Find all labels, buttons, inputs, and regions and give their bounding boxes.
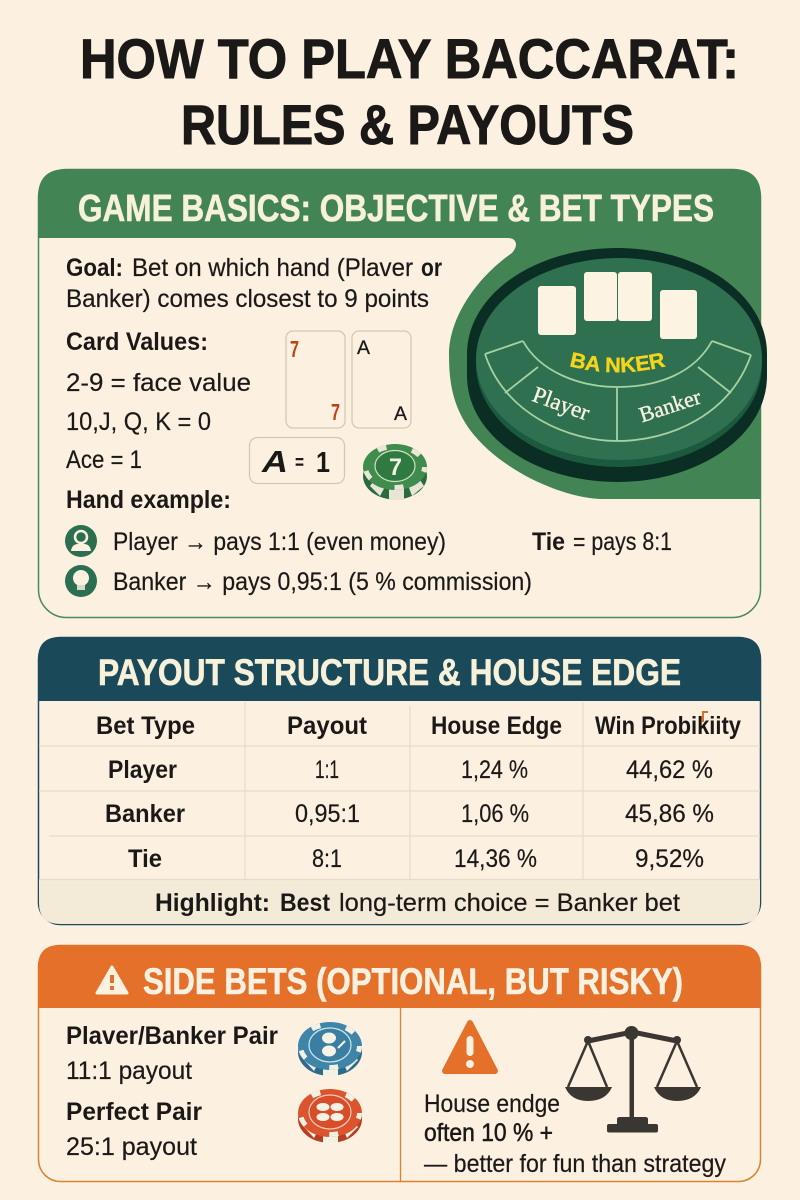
icon: card seven	[286, 331, 345, 428]
text block: goal	[66, 254, 442, 313]
table row: tie	[128, 845, 704, 873]
text: perfect pair: 25:1 payout	[66, 1133, 197, 1161]
title: RULES & PAYOUTS	[181, 93, 634, 156]
panel outline: game basics	[38, 170, 760, 618]
text: side bet warning: — better for fun than strategy	[424, 1150, 726, 1178]
table cards	[538, 272, 697, 339]
table row: player: 1:1	[315, 756, 339, 784]
icon: red chip	[298, 1089, 362, 1143]
divider	[400, 1008, 402, 1181]
text: pair bet	[66, 1022, 278, 1085]
text: banker payout: Banker → pays 0,95:1 (5 % commission)	[113, 568, 532, 596]
text: perfect pair	[66, 1098, 202, 1161]
highlight band	[39, 880, 760, 924]
heading: side bets: SIDE BETS (OPTIONAL, BUT RISKY)	[143, 961, 683, 1002]
text block: card values: 10,J, Q, K = 0	[66, 408, 211, 436]
text: player payout: Player → pays 1:1 (even money)	[113, 528, 446, 556]
icon: banker	[65, 565, 97, 597]
text: tie payout: = pays 8:1	[573, 528, 672, 556]
highlight text: Best	[280, 889, 331, 917]
table row: banker: 45,86 %	[625, 800, 714, 828]
icon: card seven: 7	[290, 336, 299, 362]
text block: card values	[66, 328, 251, 514]
label: player: Player	[529, 382, 593, 425]
icon: card ace: A	[357, 338, 370, 359]
text: pair bet: 11:1 payout	[66, 1057, 192, 1085]
table row: banker: 0,95:1	[295, 800, 360, 828]
highlight text: Highlight:	[155, 889, 270, 917]
ace equals one box: A	[261, 444, 288, 479]
ace equals one box: 1	[316, 447, 330, 479]
text: side bet warning	[424, 1090, 726, 1178]
title: HOW TO PLAY BACCARAT:	[80, 27, 739, 90]
table row: player	[108, 756, 713, 784]
table row: tie: 14,36 %	[454, 845, 537, 873]
icon: player	[65, 525, 97, 557]
icon: warning triangle	[445, 1023, 495, 1071]
header band: payout	[38, 637, 761, 701]
table header row: Win Probikiity	[595, 712, 741, 740]
icon: blue chip	[298, 1022, 362, 1076]
text: tie payout	[532, 528, 672, 556]
icon: green chip: 7	[389, 454, 402, 481]
panel: side bets	[38, 945, 761, 1182]
icon: green chip	[363, 444, 427, 500]
ace equals one box: =	[295, 452, 304, 474]
icon: card ace	[352, 331, 411, 428]
table row: player: Player	[108, 756, 177, 784]
panel: game basics	[38, 168, 767, 618]
heading: payout: PAYOUT STRUCTURE & HOUSE EDGE	[98, 652, 681, 693]
table header row	[96, 712, 741, 740]
text block: card values: Card Values:	[66, 328, 208, 356]
text: perfect pair: Perfect Pair	[66, 1098, 202, 1126]
text: tie payout: Tie	[532, 528, 565, 556]
text block: card values: Hand example:	[66, 486, 231, 514]
text block: goal: Goal:	[66, 254, 123, 282]
curve for banker label	[569, 365, 670, 372]
header band with table backdrop	[38, 169, 761, 499]
table grid lines	[39, 702, 760, 880]
text block: goal: Bet on which hand (Plaver	[132, 254, 413, 282]
icon: balance scales	[565, 1026, 701, 1132]
table row: banker: 1,06 %	[461, 800, 529, 828]
table row: player: 44,62 %	[626, 756, 713, 784]
table header row: Payout	[287, 712, 368, 740]
text: side bet warning: House endge	[424, 1090, 560, 1118]
table row: tie: 8:1	[312, 845, 342, 873]
baccarat table illustration	[467, 248, 767, 482]
table row: banker	[105, 800, 714, 828]
table header row: House Edge	[431, 712, 562, 740]
header band: side bets	[38, 945, 761, 1008]
table row: tie: Tie	[128, 845, 162, 873]
panel outline: side bets	[38, 946, 760, 1182]
panel outline: payout	[38, 638, 760, 924]
text block: goal: or	[421, 254, 442, 282]
icon: card seven: 7	[331, 399, 340, 425]
label: banker: Banker	[636, 384, 705, 427]
ace equals one box	[250, 438, 344, 484]
text block: goal: Banker) comes closest to 9 points	[66, 285, 429, 313]
label: banker yellow: BA NKER	[570, 352, 666, 372]
betting area lines	[485, 341, 751, 441]
table row: player: 1,24 %	[461, 756, 528, 784]
text: side bet warning: often 10 % +	[424, 1119, 553, 1147]
icon: card ace: A	[394, 404, 407, 425]
table header row: Bet Type	[96, 712, 195, 740]
highlight text: long-term choice = Banker bet	[339, 889, 680, 917]
panel: payout structure	[38, 637, 761, 924]
text block: card values: 2-9 = face value	[66, 369, 251, 397]
icon: warning header	[97, 967, 127, 993]
title	[80, 27, 739, 156]
table row: banker: Banker	[105, 800, 185, 828]
text block: card values: Ace = 1	[66, 446, 142, 474]
table row: tie: 9,52%	[635, 845, 704, 873]
highlight text	[155, 889, 680, 917]
text: pair bet: Plaver/Banker Pair	[66, 1022, 278, 1050]
